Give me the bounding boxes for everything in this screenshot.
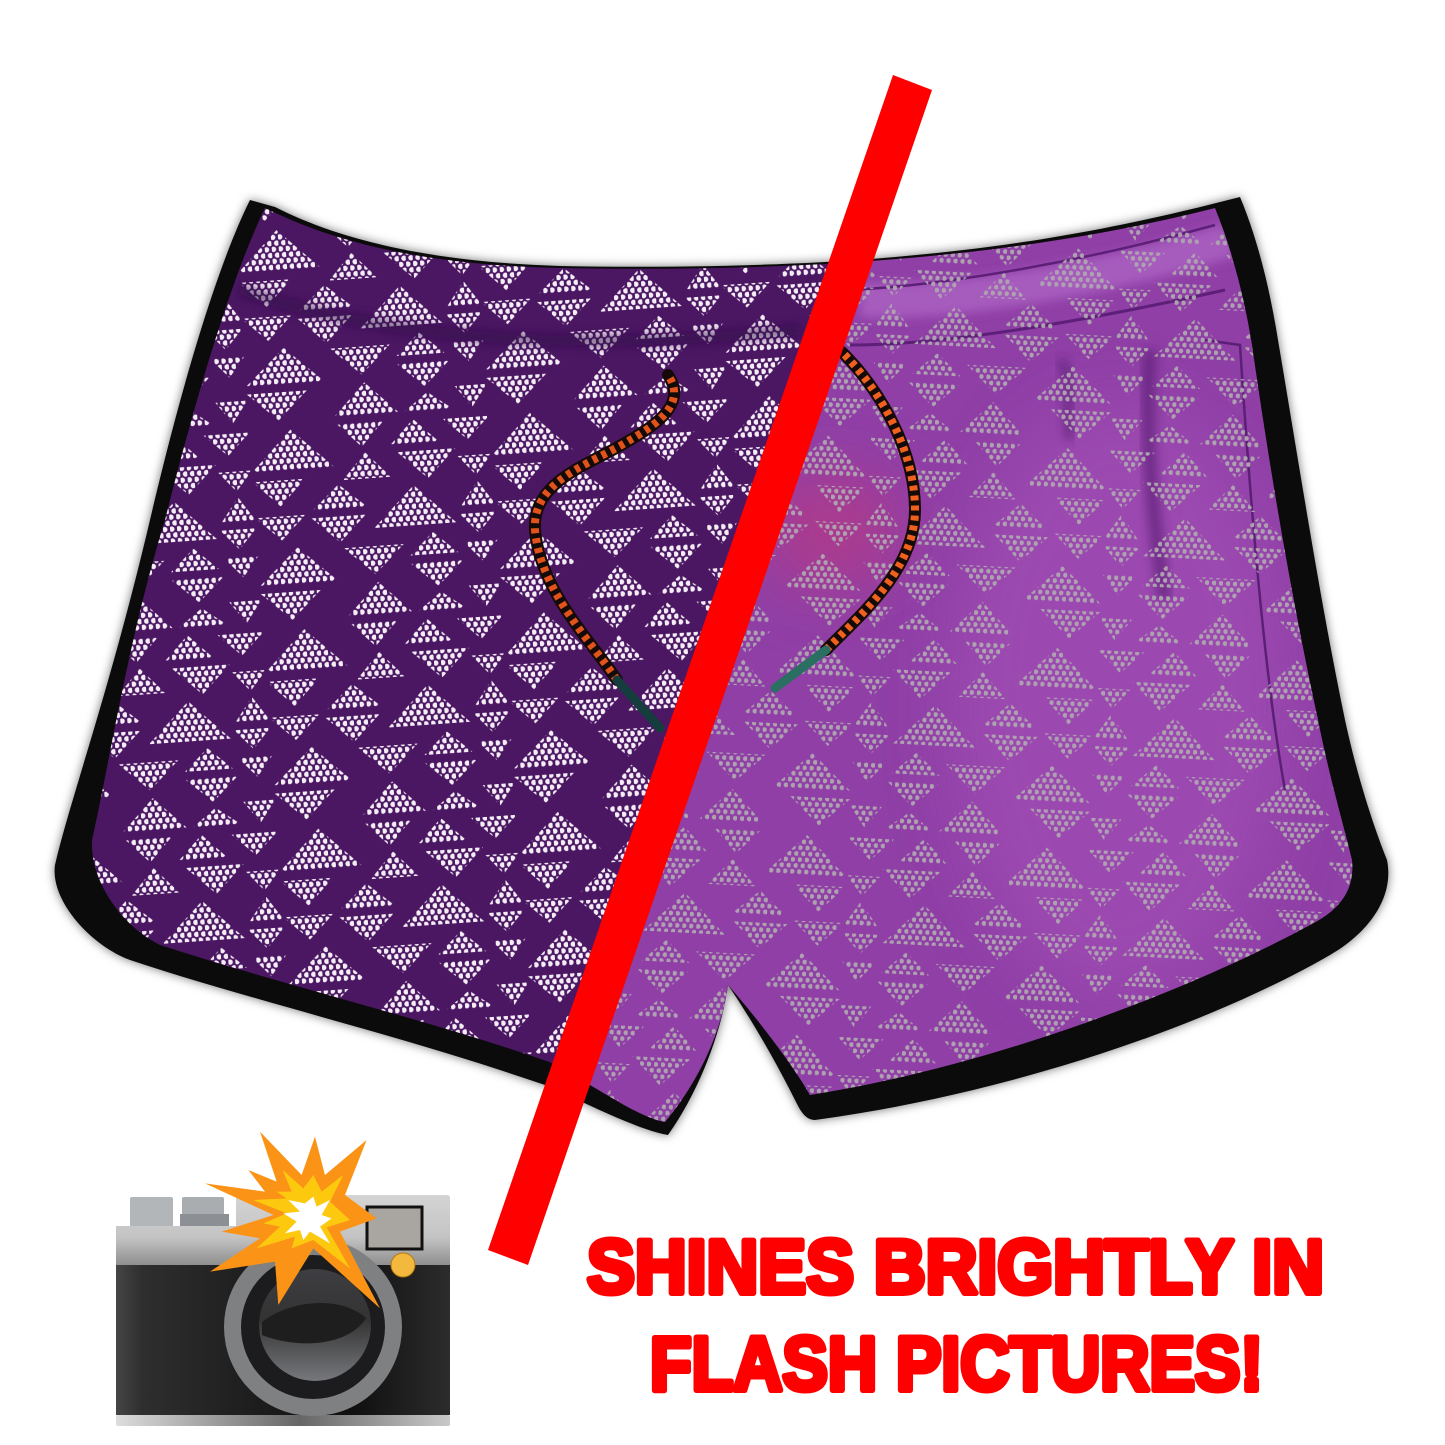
- black trim and silhouette: [55, 197, 1388, 1135]
- caption line 1: SHINES BRIGHTLY IN: [587, 1225, 1324, 1310]
- lens: [224, 1238, 402, 1416]
- camera top plate: [116, 1195, 450, 1265]
- viewfinder: [367, 1207, 422, 1249]
- yellow button: [391, 1253, 415, 1277]
- left half: dark no-flash view: [92, 208, 828, 1064]
- red diagonal divider: [488, 75, 932, 1265]
- shorts: [55, 197, 1388, 1135]
- drawstring tip: [617, 680, 660, 728]
- flash burst: [205, 1132, 380, 1308]
- camera body: [116, 1265, 450, 1415]
- drawstring: right: [775, 352, 915, 688]
- caption line 2: FLASH PICTURES!: [650, 1322, 1263, 1407]
- camera buttons: [130, 1197, 229, 1227]
- bottom strip: [116, 1415, 450, 1426]
- icon: camera with flash: [116, 1132, 450, 1426]
- caption: [587, 1225, 1324, 1407]
- right half: bright purple view: [590, 208, 1352, 1122]
- drawstring: left: [535, 375, 674, 728]
- drawstring tip: [775, 650, 826, 688]
